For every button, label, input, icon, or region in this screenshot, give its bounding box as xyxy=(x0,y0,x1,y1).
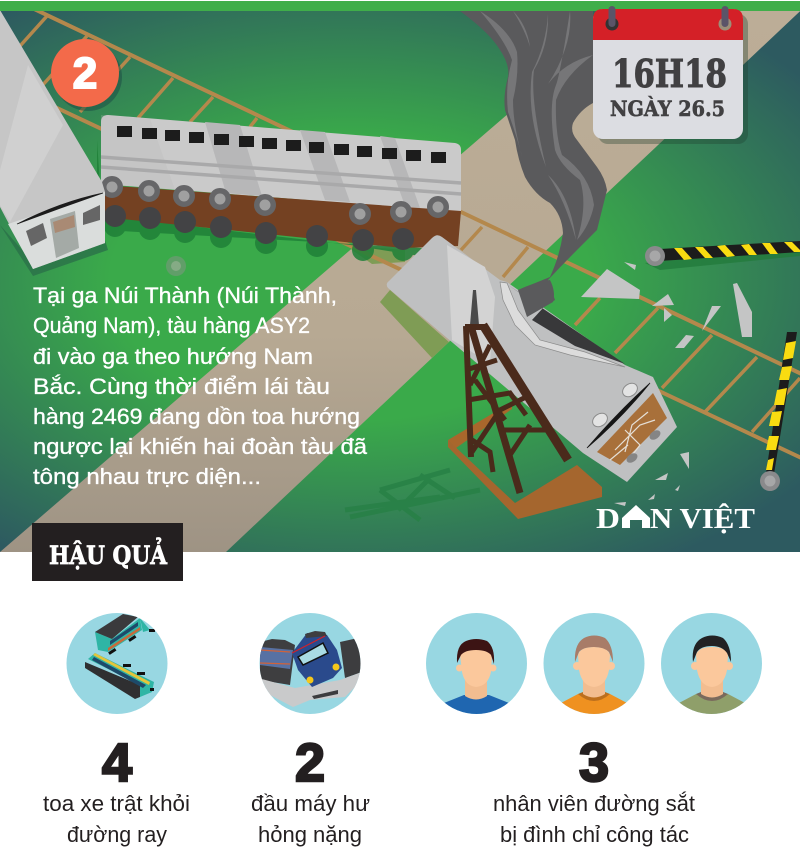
colour vignette xyxy=(0,11,800,552)
logo: Dân Việt xyxy=(596,504,755,535)
calendar time: 16H18 xyxy=(612,51,727,96)
caption xyxy=(251,791,370,847)
description text: đi vào ga theo hướng Nam xyxy=(33,344,313,369)
step number badge xyxy=(51,39,122,111)
pylon tower xyxy=(465,290,568,493)
logo: Dân Việt: D xyxy=(596,504,620,535)
number 4: 4 xyxy=(102,733,132,793)
end slit xyxy=(17,193,103,224)
end roof xyxy=(0,10,105,269)
heading: Hậu quả xyxy=(32,523,183,581)
caption: đầu máy hư xyxy=(251,791,370,816)
railway track xyxy=(20,7,800,462)
derailed carriage xyxy=(97,115,461,262)
carriage stripes xyxy=(101,157,461,194)
scene: train collision illustration xyxy=(0,0,800,552)
calendar rings xyxy=(606,6,732,30)
caption: bị đình chỉ công tác xyxy=(500,822,689,847)
carriage shadow xyxy=(97,143,422,261)
caption: nhân viên đường sắt xyxy=(493,791,696,816)
smoke streaks xyxy=(480,11,594,240)
stat: 4 carriages xyxy=(43,613,190,847)
end roof light facet xyxy=(0,65,63,222)
front slash xyxy=(587,383,650,448)
description text: Quảng Nam), tàu hàng ASY2 xyxy=(33,313,310,338)
wreck platform xyxy=(448,402,602,519)
caption: toa xe trật khỏi xyxy=(43,791,190,816)
description text: Tại ga Núi Thành (Núi Thành, xyxy=(33,283,337,308)
loco light panel xyxy=(447,245,495,363)
stat: 2 locomotives xyxy=(251,613,370,847)
number 3: 3 xyxy=(579,733,609,793)
caption xyxy=(43,791,190,847)
icon: person 2 xyxy=(544,613,644,720)
stat: 3 staff xyxy=(426,613,762,847)
torn panel xyxy=(500,282,625,367)
dark gash xyxy=(508,285,625,364)
end windows xyxy=(26,223,47,246)
window cracks xyxy=(610,412,655,460)
end door xyxy=(50,211,79,258)
smoke base xyxy=(518,280,554,317)
caption: hỏng nặng xyxy=(258,822,362,847)
smoke plume xyxy=(460,11,607,317)
carriage windows xyxy=(117,126,446,163)
calendar xyxy=(593,6,748,144)
end shadow xyxy=(0,225,108,276)
wrecked locomotive xyxy=(345,235,677,520)
front lights xyxy=(590,380,662,465)
description text: hàng 2469 đang dồn toa hướng xyxy=(33,404,360,429)
road xyxy=(0,0,800,552)
debris xyxy=(581,262,752,506)
left carriage end xyxy=(0,10,108,276)
number 2: 2 xyxy=(295,733,325,793)
olive shadows on road xyxy=(345,245,450,358)
carriage underside xyxy=(103,185,461,248)
icon: person 3 xyxy=(661,613,762,720)
lower wheels xyxy=(104,205,414,251)
icon: person 1 xyxy=(426,613,527,720)
icon: derailed carriages xyxy=(66,613,168,714)
top green bar xyxy=(0,1,800,11)
barrier top xyxy=(645,241,800,270)
wheel hubs xyxy=(106,182,444,220)
description text xyxy=(33,283,368,489)
carriage roof facets xyxy=(101,115,420,208)
front window xyxy=(597,393,667,465)
logo: Dân Việt: N VIỆT xyxy=(650,504,755,535)
description text: Bắc. Cùng thời điểm lái tàu xyxy=(33,374,330,399)
carriage roof xyxy=(101,115,461,212)
description text: tông nhau trực diện... xyxy=(33,464,261,489)
heading: Hậu quả: HẬU QUẢ xyxy=(49,538,168,570)
faint shadow of wheel xyxy=(166,256,186,276)
barrier stripes xyxy=(674,242,800,260)
end face xyxy=(8,192,105,269)
scene background xyxy=(0,11,800,552)
calendar date: NGÀY 26.5 xyxy=(610,96,725,121)
icon: damaged locomotive xyxy=(258,613,362,714)
description text: ngược lại khiến hai đoàn tàu đã xyxy=(33,434,368,459)
upper wheels xyxy=(102,176,448,224)
step number badge: 2 xyxy=(73,49,97,98)
barrier side xyxy=(760,332,797,491)
caption: đường ray xyxy=(67,822,168,847)
loco body xyxy=(387,235,677,482)
tower shadow xyxy=(345,470,480,520)
caption xyxy=(493,791,696,847)
